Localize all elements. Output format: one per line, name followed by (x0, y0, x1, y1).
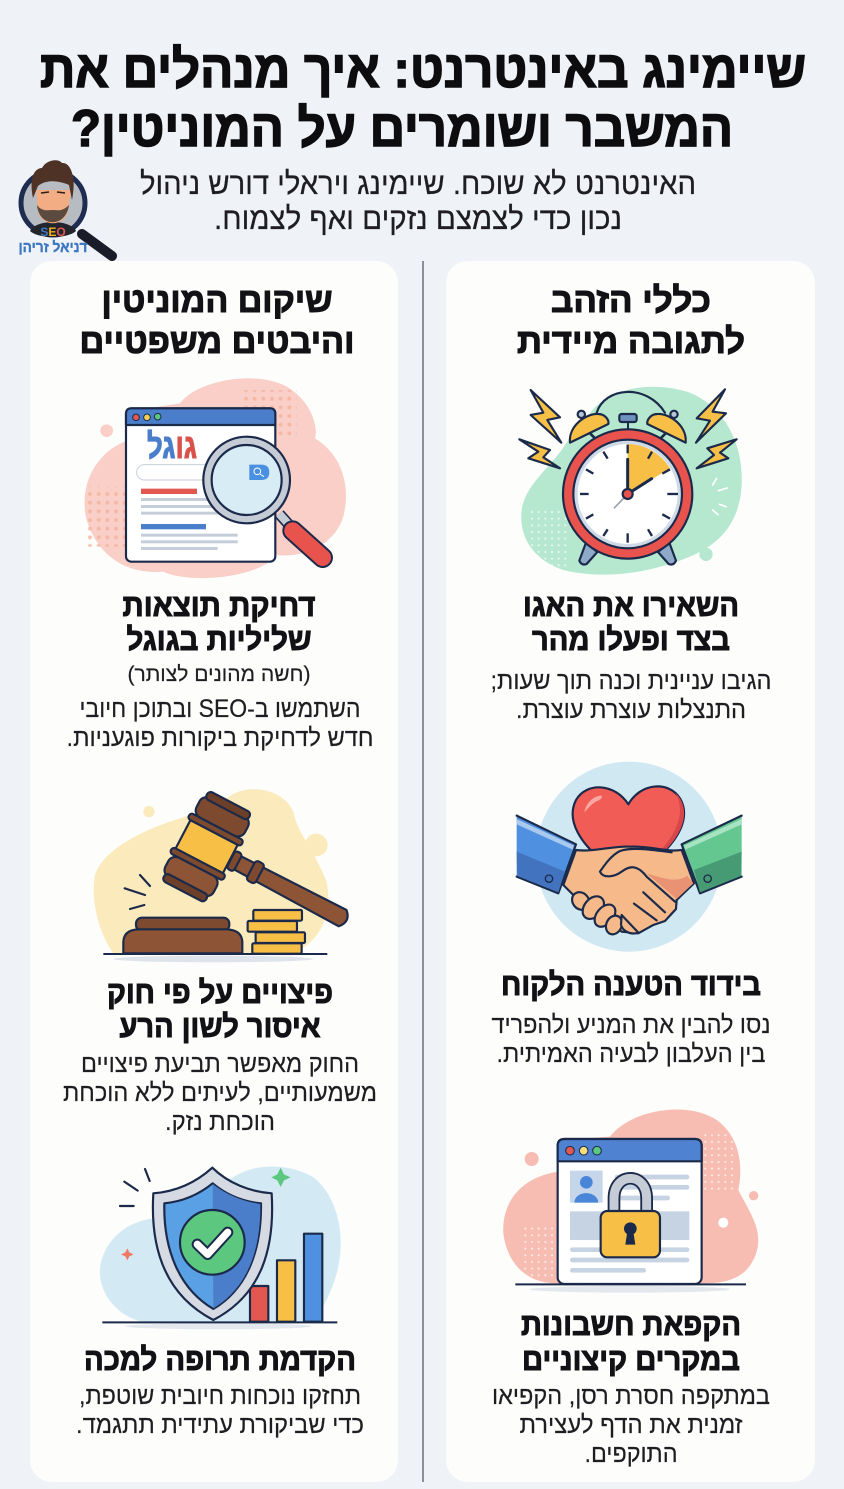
section text: prevention before the blow: תחזקו נוכחות חיובית שוטפת, (79, 1382, 361, 1410)
heading: left column: והיבטים משפטיים (80, 322, 354, 361)
logo: author avatar in magnifying glass: SEO (40, 225, 66, 239)
title: המשבר ושומרים על המוניטין? (71, 100, 733, 158)
subtitle: האינטרנט לא שוכח. שיימינג ויראלי דורש ניהול (140, 166, 696, 201)
section text: isolating the claim: בידוד הטענה הלקוח (501, 967, 761, 1002)
section text: pushing down negative results: (חשה מהונים לצותר) (128, 663, 310, 686)
heading: right column (517, 281, 745, 361)
section text: leave the ego: התנצלות עוצרת עוצרת. (516, 696, 746, 724)
heading: right column: לתגובה מיידית (517, 322, 745, 361)
icon: shield with check and rising bars (100, 1166, 341, 1329)
panel: right column (446, 261, 815, 1482)
section text: compensation by law: איסור לשון הרע (120, 1009, 320, 1044)
section text: compensation by law: הוכחת נזק. (165, 1108, 275, 1136)
heading: right column: כללי הזהב (551, 281, 711, 320)
logo: author avatar in magnifying glass: דניאל זריהן (18, 240, 88, 256)
section text: compensation by law (63, 975, 377, 1136)
section text: compensation by law: משמעותיים, לעיתים ללא הוכחת (63, 1079, 377, 1107)
section text: prevention before the blow: הקדמת תרופה למכה (84, 1342, 356, 1377)
section text: freezing accounts: במקרים קיצוניים (522, 1342, 740, 1377)
title (40, 41, 806, 158)
section text: prevention before the blow (76, 1342, 364, 1439)
section text: freezing accounts: התוקפים. (584, 1440, 678, 1468)
section text: leave the ego: הגיבו עניינית וכנה תוך שעות; (490, 667, 772, 695)
icon: gavel and coins (94, 788, 370, 965)
section text: leave the ego (490, 588, 772, 724)
heading: left column (80, 281, 354, 361)
section text: compensation by law: פיצויים על פי חוק (107, 975, 333, 1010)
icon: handshake and heart (517, 762, 742, 952)
section text: leave the ego: בצד ופעלו מהר (532, 622, 730, 657)
title: שיימינג באינטרנט: איך מנהלים את (40, 41, 806, 99)
section text: compensation by law: החוק מאפשר תביעת פיצויים (81, 1050, 359, 1078)
section text: pushing down negative results: השתמשו ב-SEO ובתוכן חיובי (80, 695, 361, 723)
section text: leave the ego: השאירו את האגו (523, 588, 739, 623)
section text: isolating the claim (492, 967, 770, 1068)
section text: freezing accounts: זמנית את הדף לעצירת (520, 1411, 742, 1439)
section text: freezing accounts (492, 1307, 770, 1468)
subtitle: נכון כדי לצמצם נזקים ואף לצמוח. (214, 201, 622, 236)
heading: left column: שיקום המוניטין (102, 281, 332, 320)
section text: pushing down negative results: חדש לדחיקת ביקורות פוגעניות. (66, 724, 374, 752)
icon: search results under magnifier: גוגל (147, 428, 197, 466)
section text: freezing accounts: הקפאת חשבונות (521, 1307, 741, 1342)
logo: author avatar in magnifying glass (18, 160, 112, 256)
panel: left column (30, 261, 398, 1482)
icon: alarm clock (519, 387, 742, 575)
section text: prevention before the blow: כדי שביקורת עתידית תתגמד. (76, 1411, 364, 1439)
icon: search results under magnifier (85, 378, 346, 578)
section text: pushing down negative results: שליליות בגוגל (126, 622, 312, 657)
section text: pushing down negative results: דחיקת תוצאות (122, 588, 316, 623)
section text: freezing accounts: במתקפה חסרת רסן, הקפיאו (492, 1382, 770, 1410)
section text: pushing down negative results (66, 588, 374, 752)
section text: isolating the claim: נסו להבין את המניע ולהפריד (492, 1011, 770, 1039)
subtitle (140, 166, 696, 236)
icon: locked browser page (503, 1109, 758, 1293)
section text: isolating the claim: בין העלבון לבעיה האמיתית. (496, 1040, 766, 1068)
